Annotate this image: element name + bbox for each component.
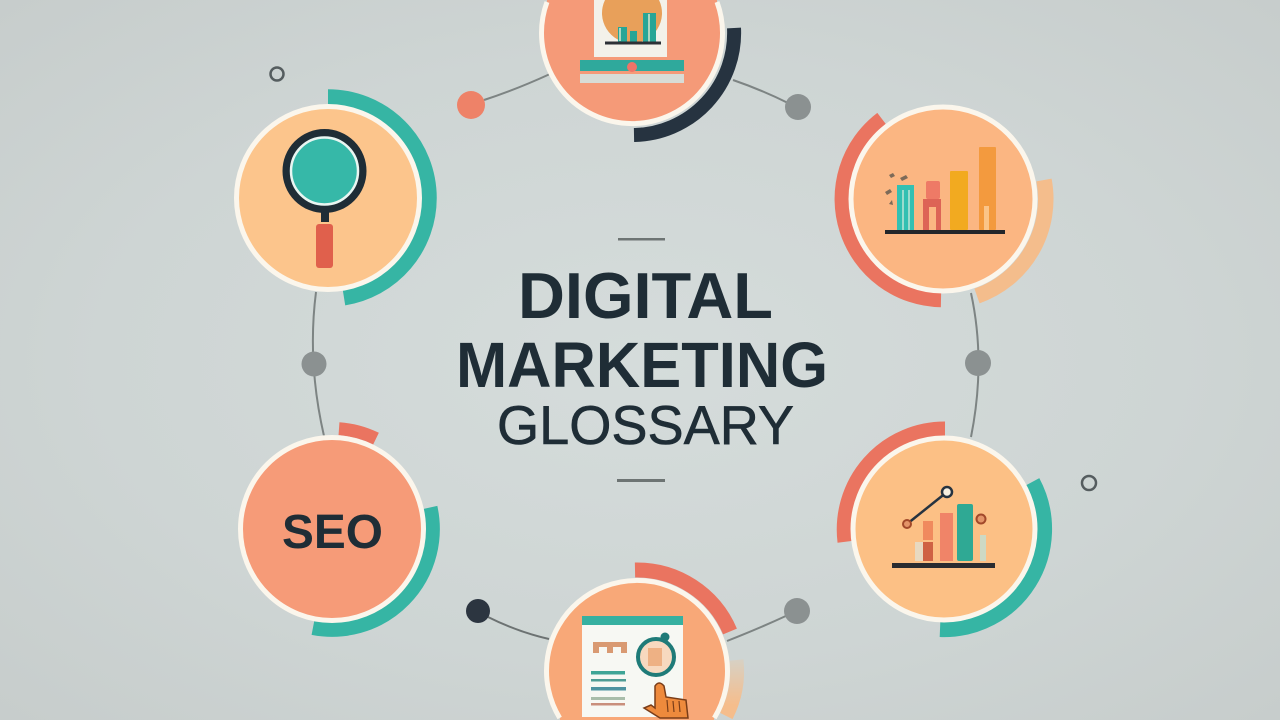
accent arc: coral [844,429,945,542]
accent arc: coral [635,570,730,632]
panel: top report node [542,0,734,135]
label: SEO: SEO [282,506,383,559]
node disc [547,580,728,720]
connector: left [302,292,326,436]
node disc [542,0,722,124]
title: MARKETING [456,329,828,401]
title: DIGITAL [518,259,773,332]
node disc [851,107,1035,291]
accent arc: coral [842,119,941,300]
icon: web page with pointer [582,616,688,718]
title: GLOSSARY [497,394,794,456]
icon: magnifying glass [286,133,362,268]
small ring: top left [270,68,284,80]
accent arc: teal [328,97,429,298]
connector: right [965,293,991,437]
accent arc: teal [940,482,1045,630]
connector: bottom right [727,598,810,641]
connector: top left [457,74,550,119]
small ring: right [1082,476,1096,490]
panel: SEO node [240,429,432,629]
icon: analytics chart [892,487,995,568]
accent arc: peach [726,660,737,716]
accent arc: teal [313,508,432,629]
divider: bottom [617,479,665,482]
icon: bar chart [885,147,1005,234]
accent arc: peach [977,180,1046,296]
panel: web page node [547,570,737,720]
node disc [853,438,1035,620]
divider: top [618,238,665,240]
node disc [240,438,424,620]
accent arc: coral [339,429,376,439]
panel: bar chart node [842,107,1046,300]
icon: report with chart [580,0,684,83]
title [456,259,828,456]
node disc [236,106,420,290]
connector: top right [733,80,811,120]
panel: magnifier node [236,97,429,298]
accent arc: navy [634,28,734,135]
connector: bottom left [466,599,549,639]
panel: analytics node [844,429,1045,630]
